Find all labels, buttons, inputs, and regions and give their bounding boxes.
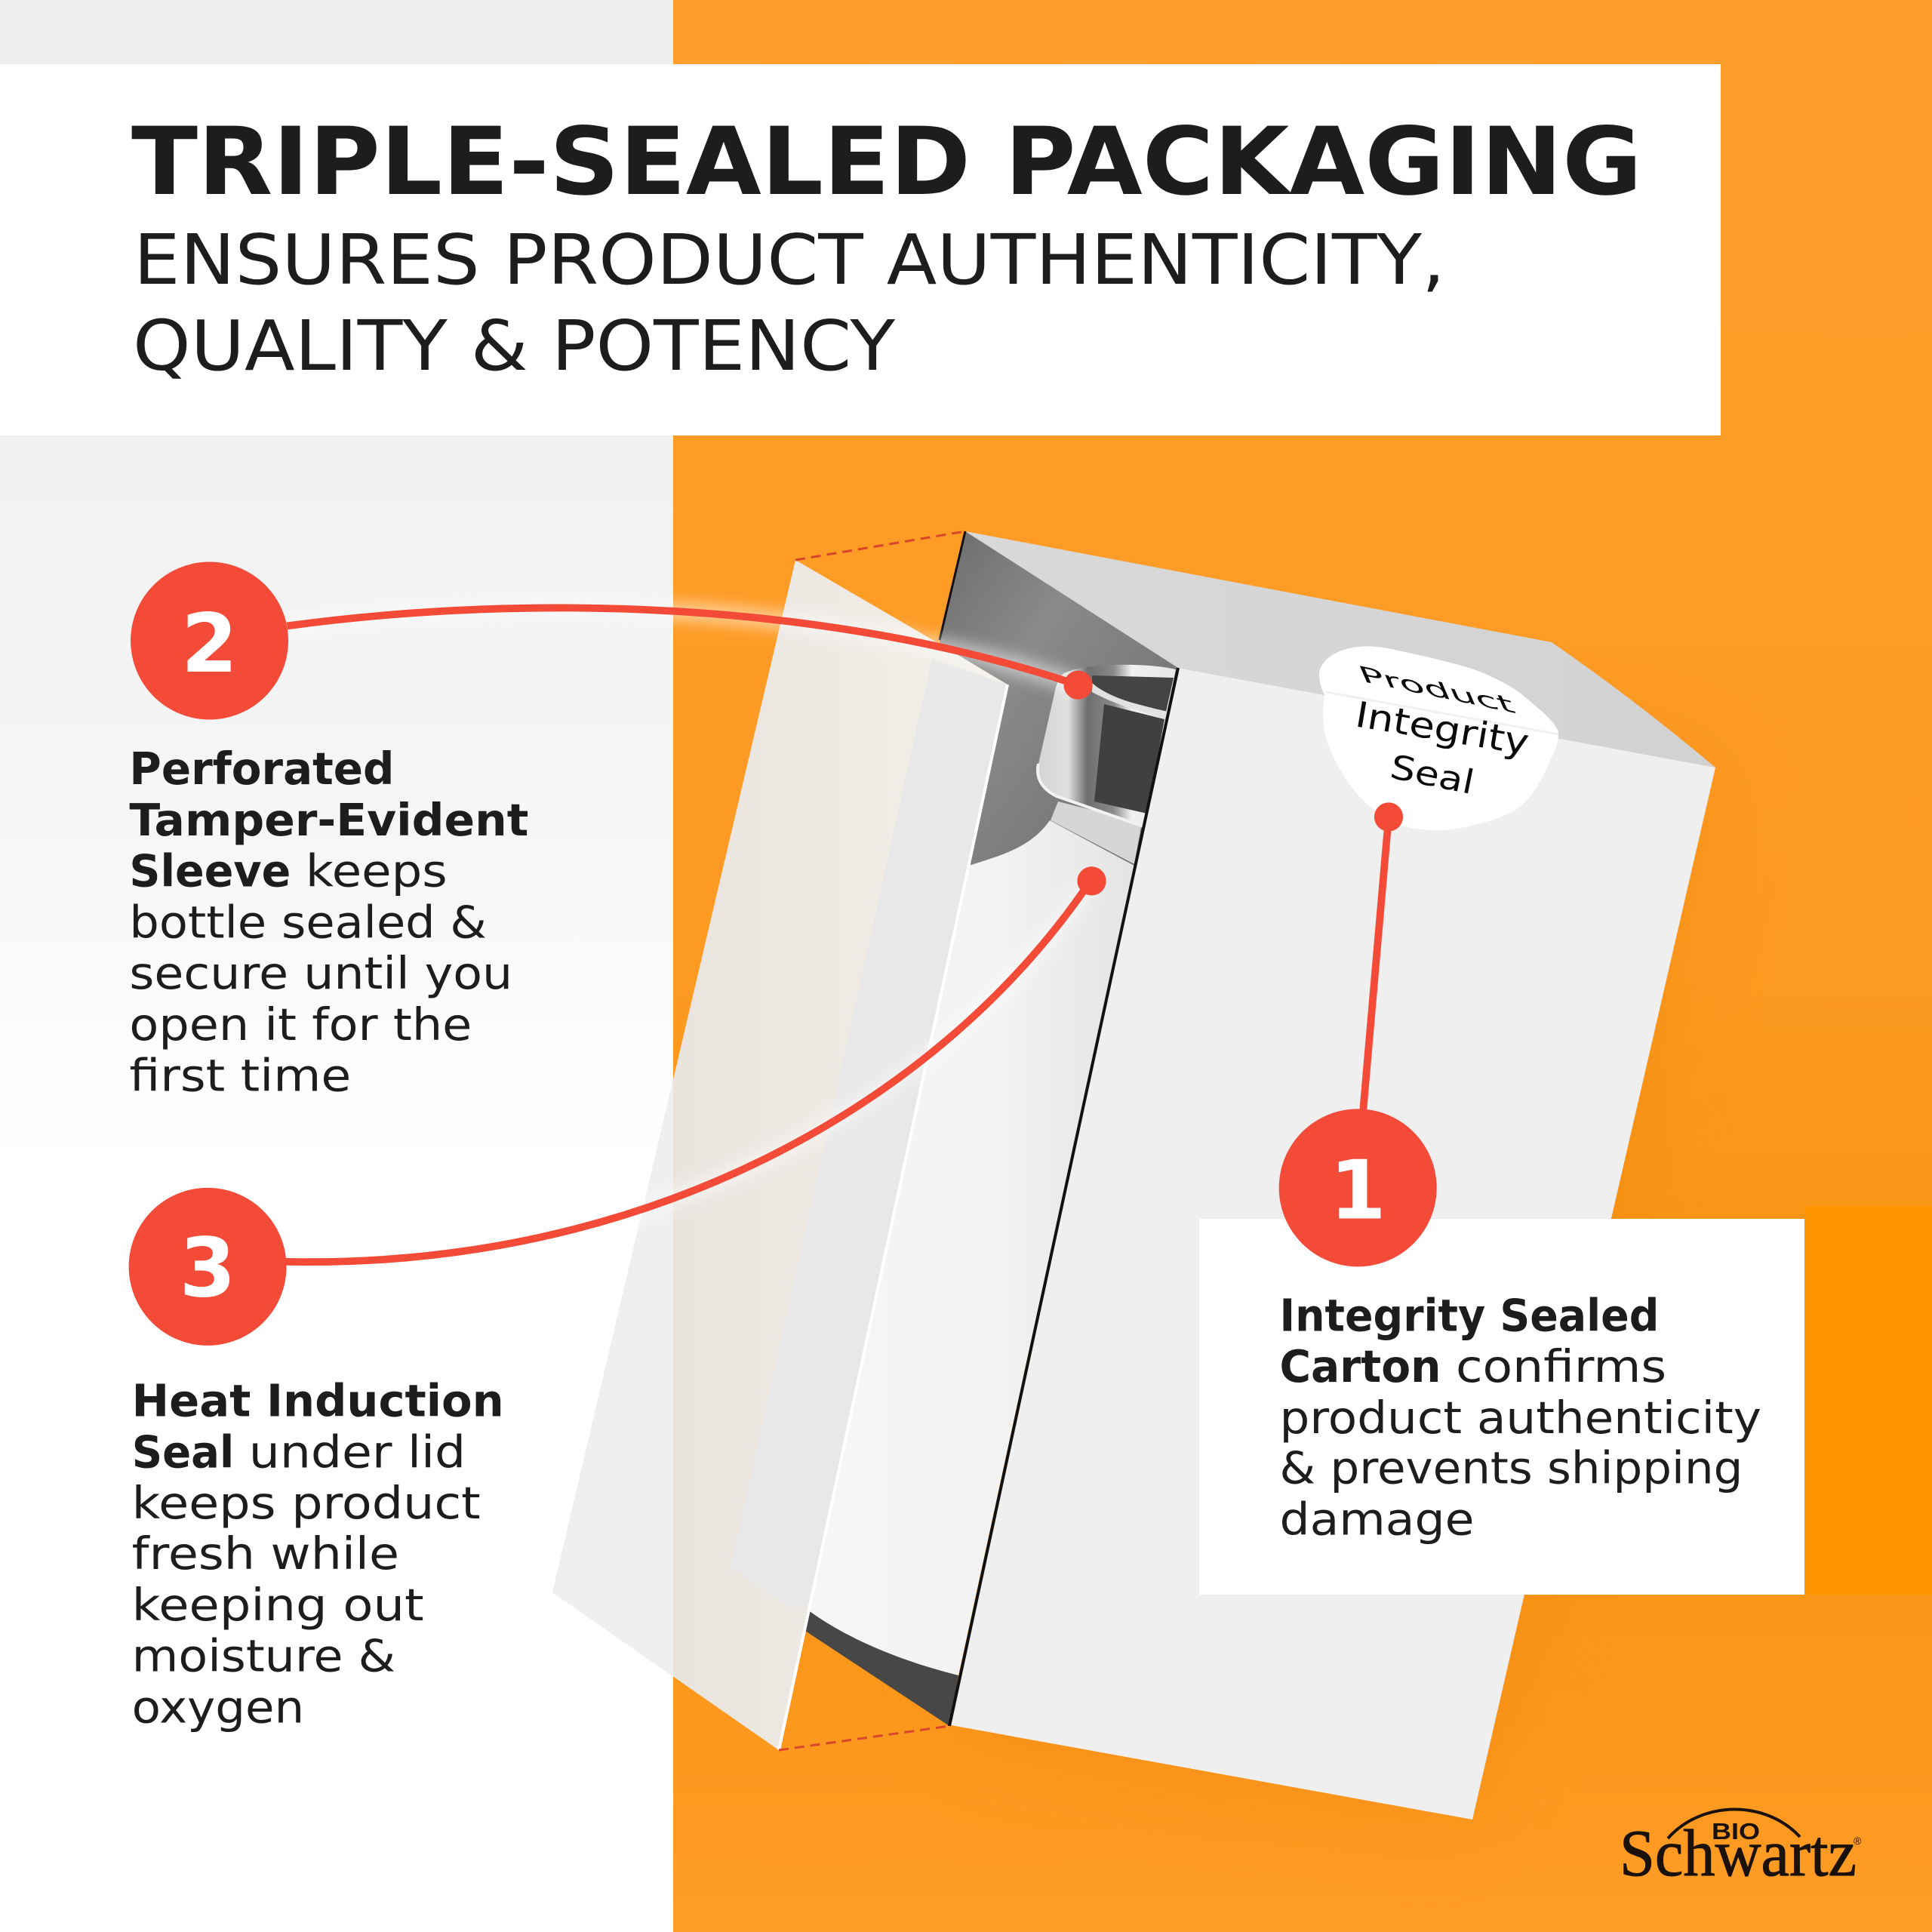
- subtitle: ENSURES PRODUCT AUTHENTICITY,: [134, 220, 1445, 300]
- text block 3: Heat Induction: [132, 1375, 504, 1427]
- carton edge line: [949, 668, 1178, 1726]
- connector 1: [1363, 802, 1403, 1115]
- seal text: Seal: Seal: [1387, 748, 1478, 802]
- title: TRIPLE-SEALED PACKAGING: [131, 108, 1642, 217]
- left background panel: [0, 0, 673, 1932]
- text block 3: fresh while: [132, 1527, 399, 1580]
- integrity seal sticker: [1319, 646, 1558, 830]
- text block 1: Integrity Sealed: [1280, 1289, 1659, 1341]
- carton front face: [951, 668, 1715, 1820]
- logo: ®: [1854, 1835, 1862, 1847]
- logo: Schwartz: [1620, 1817, 1857, 1890]
- text block 2: bottle sealed &: [129, 896, 487, 948]
- badge 1: [1279, 1109, 1437, 1266]
- text block 1: Carton: [1280, 1340, 1441, 1392]
- translucent sleeve flap: [552, 560, 1008, 1750]
- bottle cap: [1038, 665, 1176, 826]
- text block 1: confirms: [1456, 1340, 1666, 1392]
- bottle neck: [1051, 801, 1142, 864]
- text block 3: oxygen: [132, 1681, 304, 1733]
- orange background panel: [673, 0, 1932, 1932]
- badge 3: [129, 1188, 287, 1346]
- dashed fold lines: [779, 531, 965, 1750]
- text block 2: secure until you: [129, 947, 512, 999]
- orange side band: [1804, 1206, 1932, 1595]
- callout panel 1: [1199, 1219, 1804, 1595]
- carton interior: [940, 531, 1180, 875]
- text block 1: damage: [1280, 1493, 1474, 1545]
- text block 1: product authenticity: [1280, 1392, 1761, 1444]
- interior edge line: [940, 531, 965, 640]
- text block 2: Sleeve: [129, 845, 291, 897]
- text block 2: Perforated: [129, 743, 394, 795]
- text block 2: Tamper-Evident: [129, 794, 528, 846]
- bottle base shadow: [805, 1610, 958, 1726]
- text block 2: open it for the: [129, 998, 472, 1051]
- carton lid: [965, 531, 1715, 768]
- text block 1: & prevents shipping: [1280, 1442, 1743, 1494]
- badge 3: 3: [180, 1222, 236, 1316]
- header panel: [0, 64, 1721, 435]
- subtitle: [133, 220, 1445, 386]
- text block 3: keeps product: [132, 1477, 481, 1529]
- text block 3: Seal: [132, 1426, 234, 1478]
- text block 1: [1280, 1289, 1761, 1545]
- seal text: Product: Product: [1354, 661, 1519, 719]
- text block 3: keeping out: [132, 1579, 424, 1631]
- carton shadow: [951, 668, 1715, 1820]
- subtitle: QUALITY & POTENCY: [133, 306, 896, 386]
- text block 3: under lid: [249, 1426, 466, 1478]
- text block 2: keeps: [306, 845, 448, 897]
- badge 1: 1: [1330, 1144, 1386, 1238]
- text block 2: first time: [129, 1050, 351, 1102]
- logo: BIO: [1712, 1818, 1760, 1844]
- badge 2: [131, 561, 288, 719]
- text block 2: [129, 743, 528, 1102]
- connector glow: [286, 608, 1091, 1262]
- seal text: Integrity: Integrity: [1352, 694, 1532, 764]
- text block 3: moisture &: [132, 1630, 395, 1682]
- connector 3: [286, 866, 1106, 1262]
- badge 2: 2: [181, 597, 238, 691]
- inner bottle: [755, 665, 1176, 1726]
- text block 3: [132, 1375, 504, 1733]
- connector 2: [287, 608, 1093, 700]
